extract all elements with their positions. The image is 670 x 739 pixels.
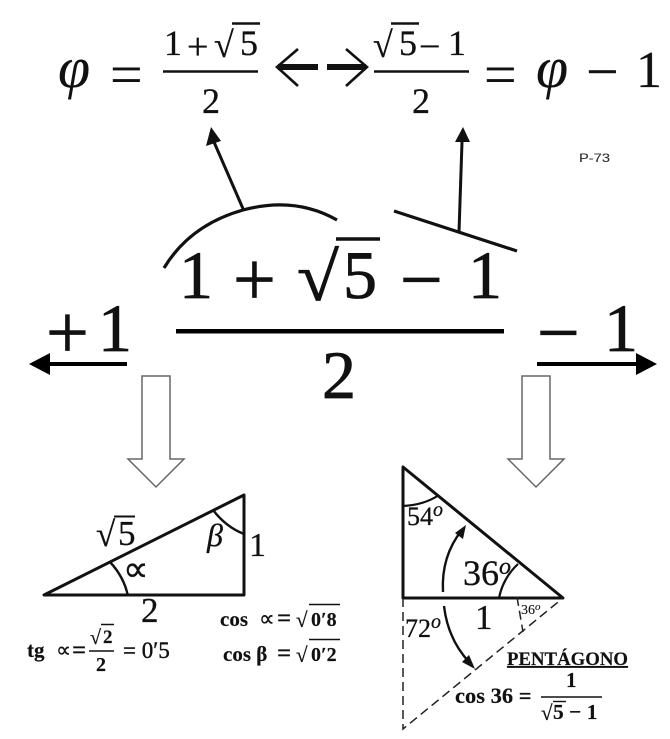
plus one with left arrow [29,290,132,375]
equals phi minus one: = [484,42,517,107]
phi equals: φ [58,35,90,100]
fraction: one plus root five over two: 5 [240,23,258,63]
tangent alpha formula: ∝ [56,638,71,662]
fraction bar [176,329,504,334]
double arrow left and right [277,49,367,86]
numerator: √ [297,240,339,315]
cos alpha formula: cos [220,607,248,631]
fraction: one plus root five over two: √ [214,25,234,65]
numerator: 1 [468,237,502,313]
fraction: one plus root five over two [163,23,260,121]
cos 36 formula: 1 [566,668,576,692]
phi equals [58,35,143,107]
cos beta formula: 0′2 [311,644,337,666]
arrow from arc to first fraction [206,127,244,211]
fraction: root five minus one over two: 2 [412,81,430,121]
phi equals: = [110,42,143,107]
curved arrow downward [444,606,475,669]
right triangle diagram [403,467,563,729]
label small 36 degrees: 36 [521,603,535,618]
label one: 1 [475,598,492,637]
pentagon heading: PENTÁGONO [507,648,628,670]
tangent alpha formula: = [72,637,86,664]
cos 36 formula: 5 − 1 [553,700,598,724]
hollow arrow down left [128,376,184,487]
fraction: one plus root five over two: 1 [164,23,182,63]
hypotenuse label: √ [96,515,116,554]
cos 36 formula [455,668,602,725]
dashed extension forming pentagon sector [403,597,563,729]
label 54 degrees: 54 [407,502,433,531]
cos alpha formula: ∝ [259,607,275,632]
tangent alpha formula: tg [27,638,45,662]
equals phi minus one: 1 [636,42,662,99]
label 36 degrees: 36 [463,553,499,593]
hollow arrow down right [508,376,564,487]
fraction: root five minus one over two [373,23,469,121]
top formula: phi equivalence [58,23,662,121]
plus one with left arrow: 1 [98,290,132,366]
hypotenuse label [96,514,136,554]
minus one with right arrow [537,290,657,375]
cos 36 formula: √ [541,701,553,725]
cos alpha formula: √ [296,608,308,632]
cos beta formula: cos β [223,642,267,666]
fraction: root five minus one over two: √ [373,25,393,65]
cos alpha formula: 0′8 [311,609,337,631]
label small 36 degrees: o [535,601,541,613]
arrow from line to second fraction [455,127,470,232]
equals phi minus one: φ [536,35,568,100]
curved arrow upward [443,525,466,592]
numerator [179,237,502,322]
label 36 degrees: o [499,554,511,580]
plus one with left arrow: + [46,291,89,375]
minus one with right arrow: − [537,291,580,375]
hypotenuse label: 5 [118,514,136,553]
label 72 degrees: 72 [405,614,431,643]
angle arcs [110,510,244,596]
cos beta formula [223,640,340,667]
alpha symbol: ∝ [123,549,149,590]
minus one with right arrow: 1 [604,290,638,366]
denominator: 2 [322,337,356,413]
fraction: root five minus one over two: − [419,26,440,68]
left triangle diagram [44,495,266,630]
numerator: + [233,238,276,322]
side label two: 2 [141,591,158,630]
fraction: root five minus one over two: 1 [448,23,466,63]
numerator: 1 [179,237,213,313]
label 54 degrees: o [433,499,443,521]
page label: P-73 [579,153,610,165]
cos alpha formula [220,604,340,632]
side label one: 1 [249,527,266,564]
cos 36 formula: cos 36 = [455,683,532,708]
cos beta formula: √ [296,643,308,667]
line over root five minus one [394,211,517,251]
arc over one plus root five [164,205,337,268]
cos alpha formula: = [277,605,291,632]
fraction: root five minus one over two: 5 [399,23,417,63]
tangent alpha formula [27,624,170,676]
fraction: one plus root five over two: 2 [202,81,220,121]
numerator: 5 [343,237,377,313]
cos beta formula: = [277,640,291,667]
central fraction [176,237,504,413]
tangent alpha formula: = 0′5 [123,638,170,663]
equals phi minus one: − [586,39,619,104]
triangle [403,467,563,598]
tangent alpha formula: √ [90,627,101,649]
fraction: one plus root five over two: + [187,26,208,68]
numerator: − [400,238,443,322]
angle arcs [403,495,518,598]
label 72 degrees: o [431,611,441,633]
triangle [44,495,244,595]
beta symbol: β [206,517,223,553]
tangent alpha formula: 2 [103,627,112,648]
tangent alpha formula: 2 [96,654,106,676]
equals phi minus one [484,35,662,107]
